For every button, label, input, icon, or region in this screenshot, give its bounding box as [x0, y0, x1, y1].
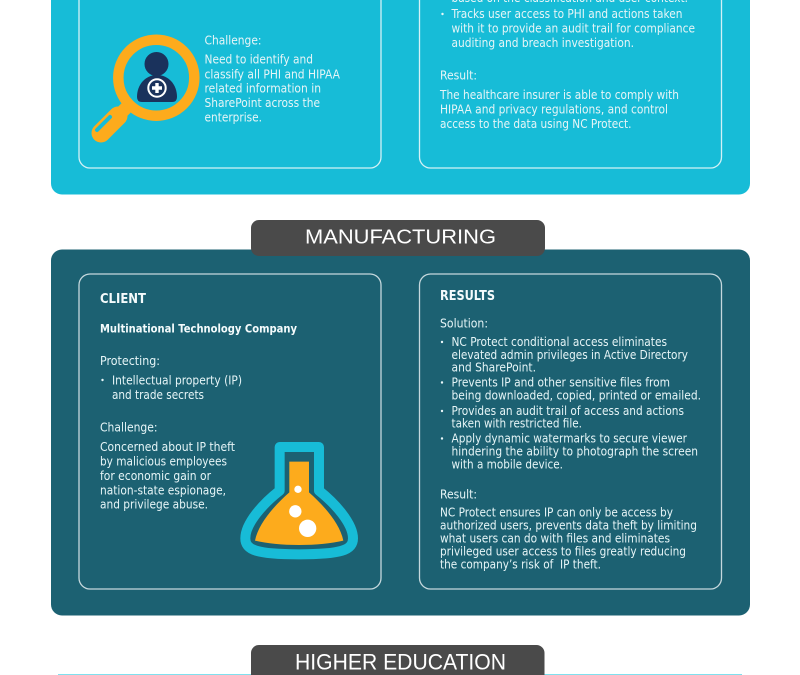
text: solution bullets: NC Protect conditional access eliminates: [452, 335, 667, 349]
text: manufacturing challenge: [100, 421, 235, 512]
text: manufacturing result: the company’s risk of IP theft.: [440, 558, 601, 572]
text: solution bullets: Prevents IP and other sensitive files from: [452, 376, 670, 390]
text: healthcare solution bullets: auditing and breach investigation.: [452, 36, 634, 50]
text: manufacturing result: NC Protect ensures IP can only be access by: [440, 506, 673, 520]
text: solution bullets: and SharePoint.: [452, 361, 536, 375]
text: healthcare challenge: [204, 34, 341, 124]
text: client name: Multinational Technology Company: [100, 321, 297, 335]
heading: client: CLIENT: [100, 291, 147, 307]
icon: flask: [245, 447, 353, 554]
text: solution bullets: [440, 317, 701, 472]
text: healthcare result: Result:: [440, 68, 477, 82]
heading: manufacturing: MANUFACTURING: [305, 226, 496, 248]
text: solution bullets: with a mobile device.: [452, 458, 563, 472]
panel: manufacturing client box: [79, 274, 381, 589]
text: healthcare challenge: Need to identify and: [204, 53, 313, 67]
text: healthcare solution bullets: [441, 0, 695, 50]
text: manufacturing challenge: and privilege abuse.: [100, 498, 208, 512]
heading: manufacturing: [251, 220, 545, 256]
text: healthcare result: access to the data using NC Protect.: [440, 117, 632, 131]
heading: results: RESULTS: [440, 288, 495, 304]
text: manufacturing challenge: by malicious employees: [100, 454, 227, 468]
text: solution bullets: Solution:: [440, 317, 488, 331]
text: protecting: and trade secrets: [112, 388, 204, 402]
panel: higher education top edge: [58, 674, 742, 675]
panel: manufacturing: [51, 250, 750, 616]
text: manufacturing result: [440, 488, 697, 572]
text: solution bullets: being downloaded, copied, printed or emailed.: [452, 389, 701, 403]
text: protecting: Protecting:: [100, 354, 160, 368]
text: healthcare challenge: related information in: [204, 82, 321, 96]
text: healthcare challenge: enterprise.: [204, 110, 262, 124]
text: solution bullets: Apply dynamic watermarks to secure viewer: [452, 432, 687, 446]
text: solution bullets: taken with restricted file.: [452, 417, 582, 431]
text: manufacturing challenge: Concerned about IP theft: [100, 440, 235, 454]
text: manufacturing challenge: Challenge:: [100, 421, 158, 435]
text: solution bullets: hindering the ability to photograph the screen: [452, 445, 698, 459]
text: healthcare result: The healthcare insurer is able to comply with: [439, 88, 679, 102]
text: manufacturing challenge: for economic gain or: [100, 469, 211, 483]
text: healthcare challenge: SharePoint across the: [204, 96, 320, 110]
text: healthcare solution bullets: with it to provide an audit trail for compliance: [452, 22, 695, 36]
panel: healthcare: [51, 0, 750, 194]
text: manufacturing result: privileged user access to files greatly reducing: [440, 545, 686, 559]
text: protecting: Intellectual property (IP): [112, 374, 242, 388]
text: solution bullets: Provides an audit trail of access and actions: [452, 404, 684, 418]
text: manufacturing result: authorized users, prevents data theft by limiting: [440, 519, 697, 533]
text: manufacturing result: Result:: [440, 488, 477, 502]
text: healthcare challenge: classify all PHI and HIPAA: [204, 67, 341, 81]
panel: healthcare results box: [420, 0, 722, 168]
text: healthcare result: [439, 68, 679, 131]
text: protecting: [100, 354, 242, 402]
text: manufacturing challenge: nation-state espionage,: [100, 483, 226, 497]
text: solution bullets: elevated admin privileges in Active Directory: [452, 348, 688, 362]
text: healthcare result: HIPAA and privacy regulations, and control: [440, 103, 668, 117]
text: healthcare challenge: Challenge:: [204, 34, 262, 48]
text: healthcare solution bullets: Tracks user access to PHI and actions taken: [451, 7, 682, 21]
panel: healthcare client box: [79, 0, 381, 168]
heading: higher education: [251, 645, 544, 675]
text: manufacturing result: what users can do with files and eliminates: [440, 532, 670, 546]
icon: magnifier with patient: [97, 40, 194, 133]
panel: manufacturing results box: [420, 274, 722, 589]
heading: higher education: HIGHER EDUCATION: [295, 650, 506, 674]
